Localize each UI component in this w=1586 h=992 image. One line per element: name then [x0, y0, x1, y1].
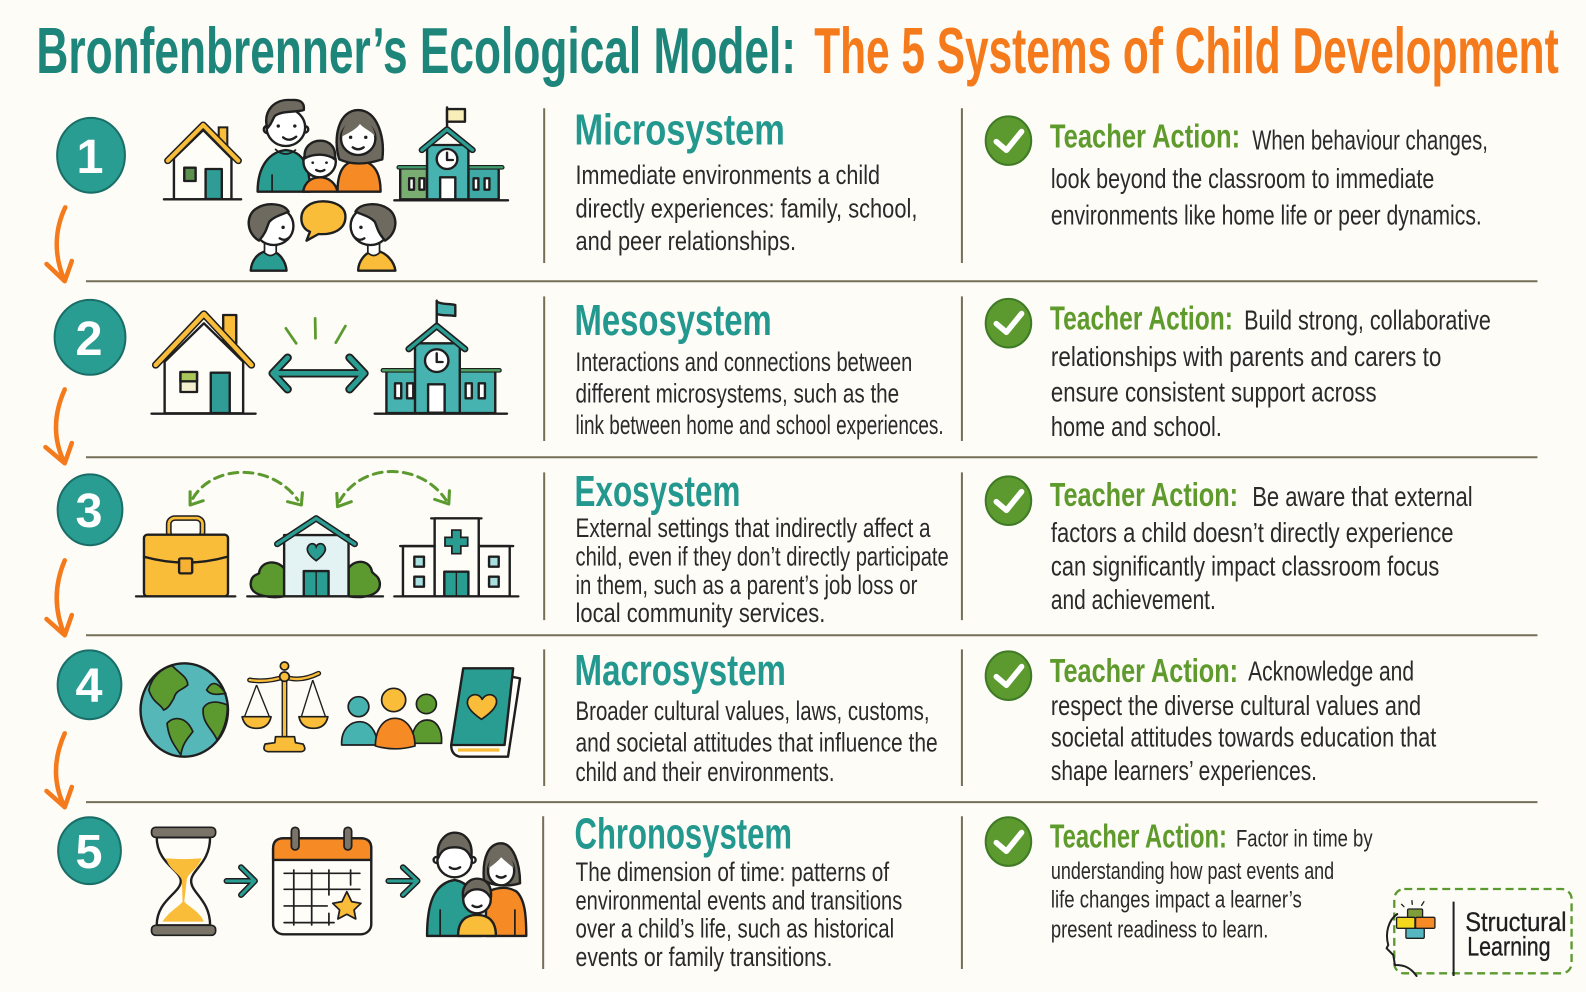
- panel: mesosystem row: [46, 297, 1491, 463]
- text: microsystem: directly experiences: family, school,: [576, 193, 917, 223]
- number badge 4: 4: [76, 659, 103, 713]
- icon: check 1: [986, 116, 1031, 165]
- teacher action 3: Be aware that external: [1252, 481, 1473, 512]
- text: macrosystem: child and their environments.: [576, 757, 834, 787]
- icon: check 2: [986, 299, 1031, 347]
- panel: exosystem row: [47, 468, 1473, 635]
- number badge 5: 5: [76, 825, 103, 879]
- teacher action 3: [1050, 477, 1473, 615]
- panel: macrosystem row: [47, 647, 1437, 807]
- icon: hourglass: [152, 827, 216, 935]
- arrow 3 to 4: [47, 560, 72, 635]
- teacher action 3: and achievement.: [1051, 584, 1216, 615]
- icon: dashed arcs: [190, 471, 449, 507]
- title: Bronfenbrenner’s Ecological Model:: [36, 14, 796, 87]
- teacher action 4: Acknowledge and: [1248, 656, 1414, 687]
- teacher action 4: [1050, 653, 1437, 786]
- teacher action 1: When behaviour changes,: [1252, 125, 1488, 156]
- logo: Structural Learning: Structural: [1465, 907, 1567, 937]
- number badge 4: [58, 650, 121, 719]
- teacher action 2: Build strong, collaborative: [1244, 305, 1491, 336]
- icon: school: [394, 107, 508, 200]
- logo: Structural Learning: [1387, 889, 1572, 976]
- icon: family: [427, 833, 526, 936]
- text: chronosystem: environmental events and transitions: [576, 885, 902, 915]
- teacher action 4: societal attitudes towards education that: [1051, 722, 1437, 753]
- teacher action 3: can significantly impact classroom focus: [1051, 551, 1439, 582]
- arrow 1 to 2: [47, 207, 72, 281]
- logo: Structural Learning: Learning: [1467, 932, 1551, 962]
- text: exosystem: local community services.: [576, 598, 825, 628]
- teacher action 1: [1050, 119, 1488, 231]
- number badge 2: 2: [76, 312, 103, 366]
- text: microsystem: Immediate environments a child: [576, 160, 880, 190]
- icons: hourglass, calendar, family: [152, 827, 526, 936]
- icon: two-way arrow: [273, 318, 364, 389]
- teacher action 5: Teacher Action:: [1050, 819, 1227, 856]
- icons: home and school link: [152, 301, 507, 414]
- icon: house: [152, 314, 256, 414]
- teacher action 1: look beyond the classroom to immediate: [1051, 163, 1434, 194]
- icon: briefcase: [136, 518, 235, 596]
- panel: chronosystem row: [58, 811, 1373, 972]
- text: mesosystem: link between home and school experiences.: [576, 410, 944, 440]
- text: microsystem: [575, 107, 917, 256]
- teacher action 1: Teacher Action:: [1050, 119, 1240, 156]
- icon: globe: [141, 663, 228, 757]
- teacher action 5: present readiness to learn.: [1051, 917, 1268, 944]
- icon: calendar: [273, 827, 371, 934]
- text: macrosystem: and societal attitudes that influence the: [576, 728, 938, 758]
- arrow 2 to 3: [46, 389, 72, 463]
- teacher action 2: [1050, 301, 1491, 442]
- arrow: calendar to family: [388, 867, 417, 895]
- icon: hospital: [394, 518, 518, 596]
- text: exosystem: child, even if they don’t directly participate: [576, 541, 949, 571]
- number badge 2: [55, 300, 125, 375]
- text: chronosystem: Chronosystem: [575, 811, 792, 859]
- icon: people: [342, 688, 442, 749]
- icon: check 5: [986, 817, 1031, 866]
- text: chronosystem: [575, 811, 902, 972]
- text: exosystem: External settings that indirectly affect a: [576, 513, 931, 543]
- icon: peers talking: [249, 201, 395, 271]
- teacher action 4: shape learners’ experiences.: [1051, 755, 1317, 786]
- number badge 1: 1: [77, 130, 104, 184]
- icon: community house: [247, 518, 383, 597]
- panel: microsystem row: [47, 100, 1488, 281]
- teacher action 3: factors a child doesn’t directly experience: [1051, 517, 1453, 548]
- teacher action 4: Teacher Action:: [1050, 653, 1238, 690]
- text: mesosystem: Interactions and connections between: [576, 347, 912, 377]
- teacher action 5: life changes impact a learner’s: [1051, 886, 1302, 913]
- icon: check 3: [986, 476, 1031, 525]
- text: exosystem: Exosystem: [575, 468, 740, 516]
- teacher action 5: [1050, 819, 1373, 944]
- text: exosystem: in them, such as a parent’s job loss or: [576, 570, 917, 600]
- teacher action 2: ensure consistent support across: [1051, 377, 1377, 408]
- text: mesosystem: Mesosystem: [575, 297, 772, 345]
- text: macrosystem: Broader cultural values, laws, customs,: [576, 696, 930, 726]
- teacher action 3: Teacher Action:: [1050, 477, 1238, 514]
- number badge 3: [58, 474, 122, 545]
- icons: globe, scales, people, book: [141, 662, 520, 757]
- text: macrosystem: [575, 647, 938, 787]
- text: chronosystem: The dimension of time: patterns of: [576, 857, 890, 887]
- teacher action 2: home and school.: [1051, 411, 1222, 442]
- teacher action 5: understanding how past events and: [1051, 858, 1334, 885]
- text: macrosystem: Macrosystem: [575, 647, 786, 695]
- text: exosystem: [575, 468, 949, 628]
- icons: workplace, community, hospital: [136, 471, 518, 597]
- text: chronosystem: over a child’s life, such as historical: [576, 914, 894, 944]
- icon: book: [451, 668, 520, 757]
- arrow 4 to 5: [47, 733, 72, 807]
- icon: school: [375, 301, 507, 414]
- number badge 1: [57, 118, 125, 193]
- icon: family: [258, 100, 383, 192]
- teacher action 2: Teacher Action:: [1050, 301, 1233, 338]
- number badge 3: 3: [76, 484, 103, 538]
- teacher action 5: Factor in time by: [1236, 826, 1373, 853]
- arrow: hourglass to calendar: [227, 867, 255, 895]
- icon: check 4: [986, 651, 1031, 700]
- text: microsystem: and peer relationships.: [576, 226, 796, 256]
- icons: home, family, school, peers: [164, 100, 508, 271]
- number badge 5: [58, 817, 121, 884]
- text: mesosystem: different microsystems, such as the: [576, 379, 899, 409]
- text: chronosystem: events or family transitions.: [576, 942, 832, 972]
- teacher action 4: respect the diverse cultural values and: [1051, 690, 1421, 721]
- teacher action 2: relationships with parents and carers to: [1051, 341, 1441, 372]
- text: mesosystem: [575, 297, 944, 440]
- text: microsystem: Microsystem: [575, 107, 785, 155]
- icon: house: [164, 125, 241, 199]
- icon: scales: [242, 662, 328, 752]
